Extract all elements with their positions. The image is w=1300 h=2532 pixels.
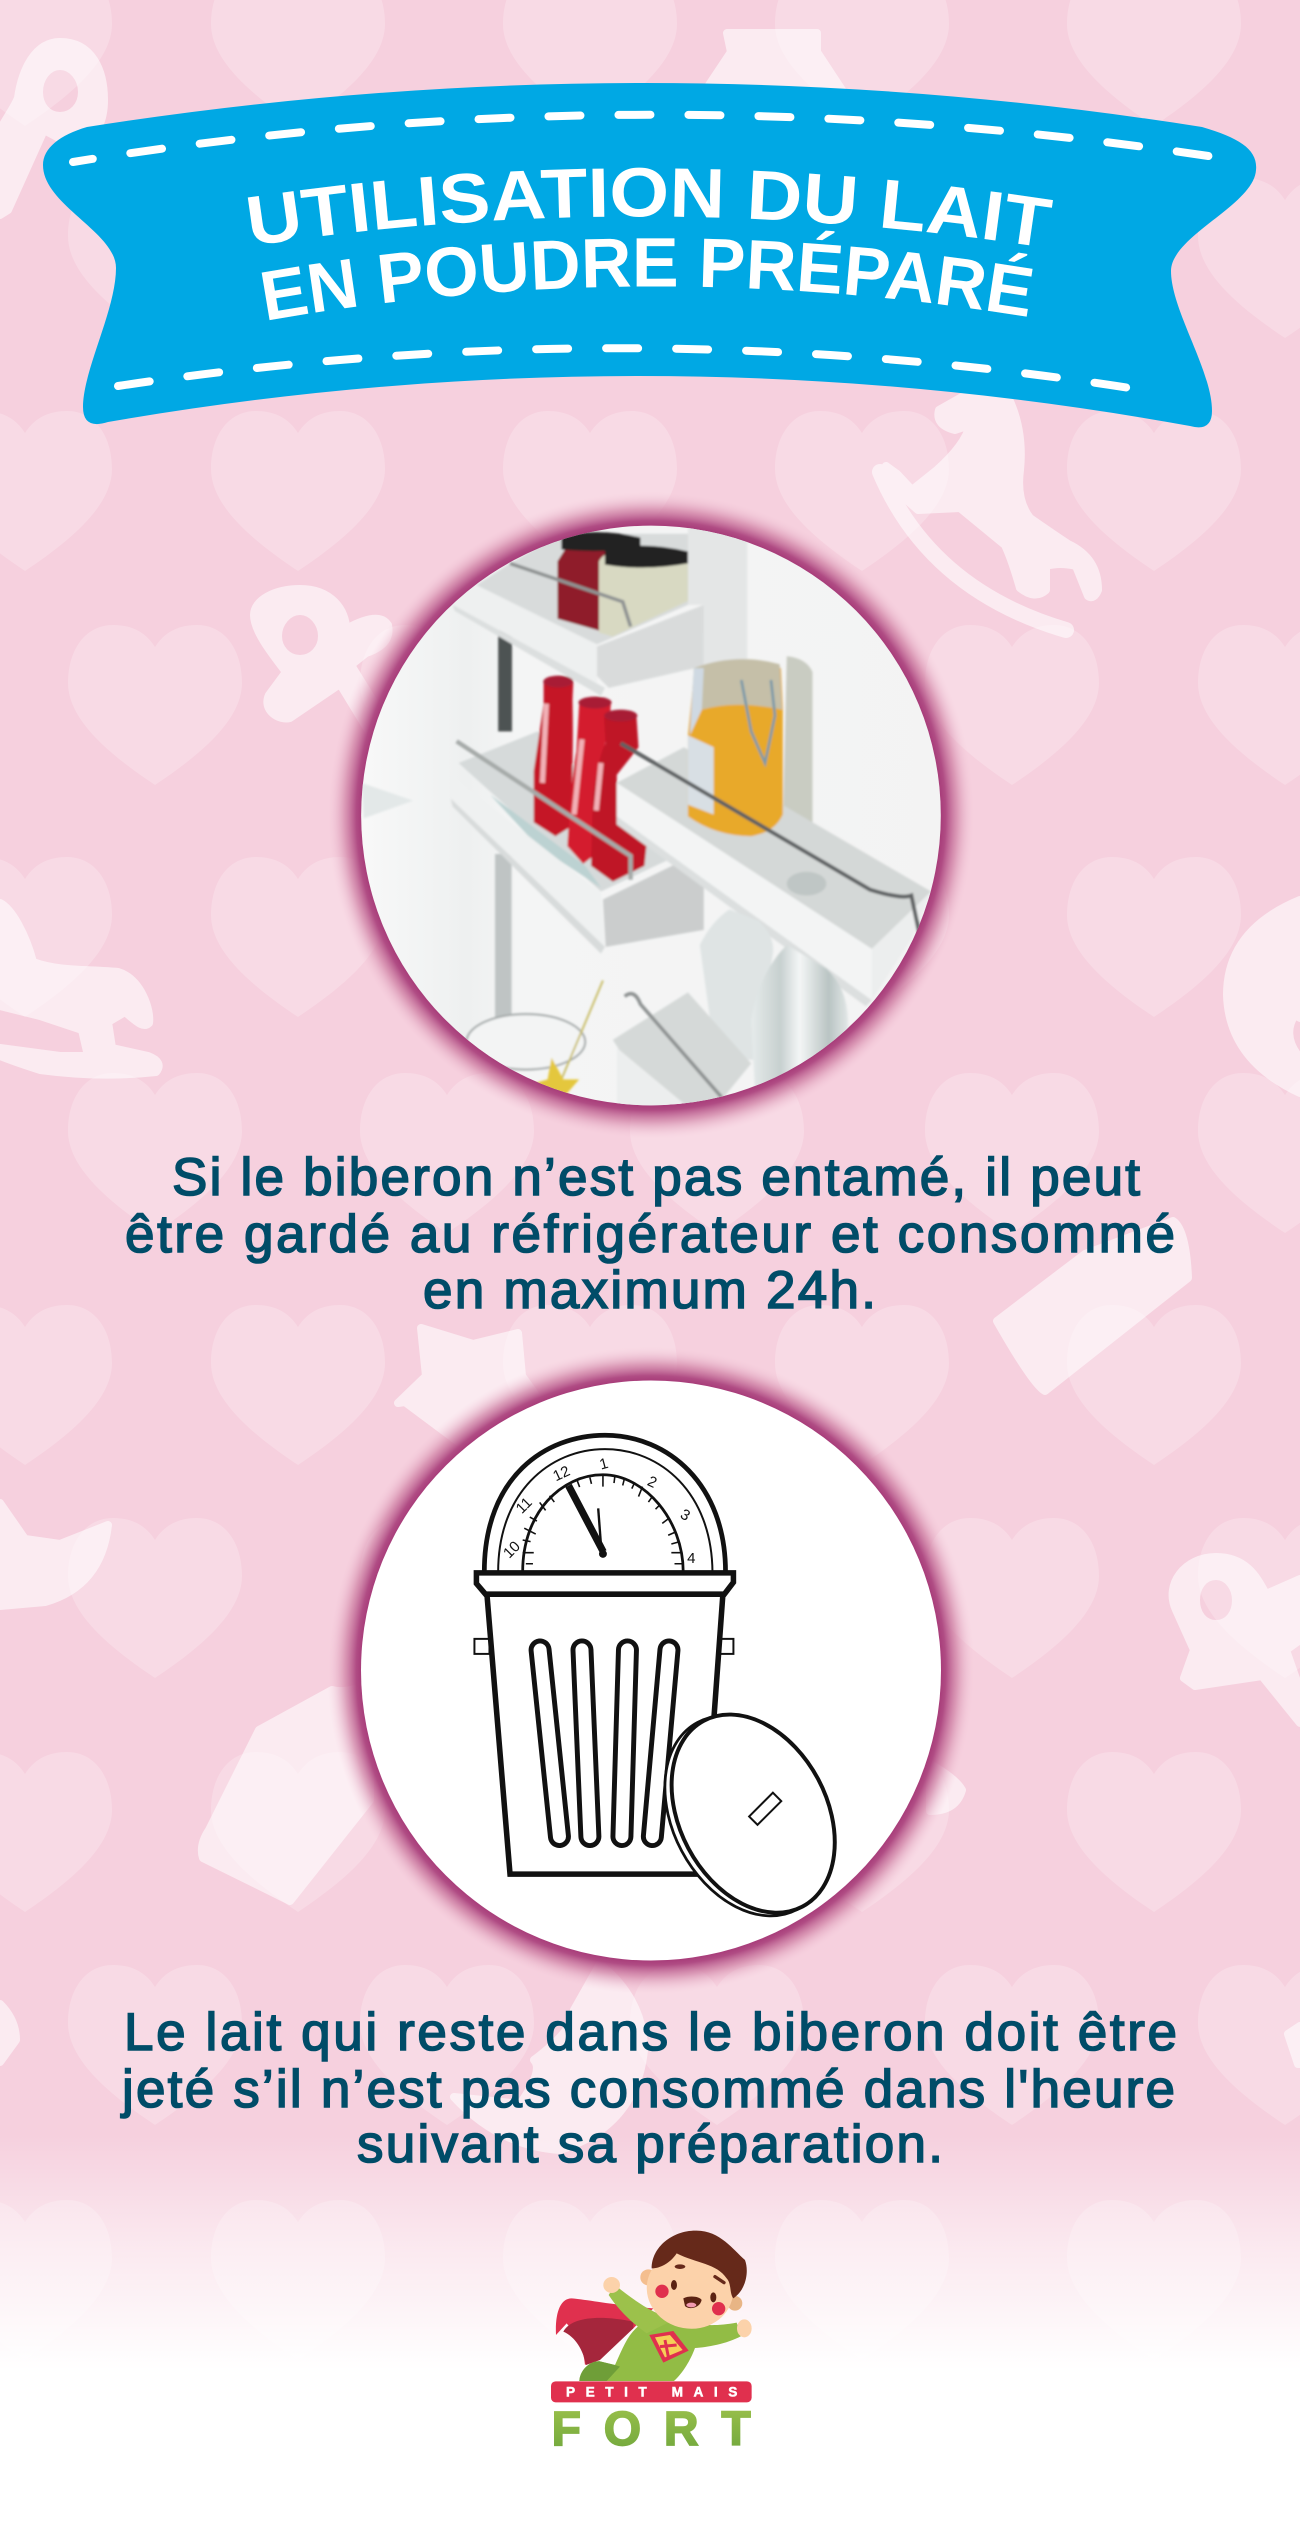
paragraph: discard rule: jeté s’il n’est pas consommé dans l'heure (120, 2060, 1175, 2119)
icon: clock dome: 12 (550, 1463, 573, 1485)
paragraph: refrigerator rule: être gardé au réfrigérateur et consommé (125, 1205, 1175, 1264)
glasses (700, 909, 773, 1060)
bottom white fade (0, 2135, 1300, 2370)
icon: clock dome: 10 (500, 1538, 524, 1562)
icon: superhero baby mascot (556, 2231, 752, 2381)
icon: clock dome: 4 (687, 1550, 696, 1567)
icon: clock dome: 1 (598, 1455, 610, 1474)
logo banner (551, 2381, 752, 2402)
right shelf (617, 747, 931, 949)
top shelf (476, 534, 688, 644)
logo wordmark: FORT (552, 2403, 751, 2456)
icon: clock dome: 11 (513, 1494, 536, 1517)
icon: clock dome: 3 (677, 1506, 693, 1525)
middle shelf (459, 731, 672, 892)
paragraph: refrigerator rule: Si le biberon n’est pas entamé, il peut (172, 1148, 1140, 1207)
paragraph: discard rule: suivant sa préparation. (357, 2115, 943, 2174)
circle photo: refrigerator door shelves (327, 492, 975, 1143)
icon: clock dome: 2 (645, 1473, 660, 1492)
icon: trash can lid (632, 1686, 868, 1944)
paragraph: discard rule (120, 2003, 1177, 2174)
jars top (556, 548, 607, 632)
title ribbon banner: EN POUDRE PRÉPARÉ (262, 230, 1033, 320)
cocktail glass (467, 1014, 585, 1069)
paragraph: discard rule: Le lait qui reste dans le biberon doit être (124, 2003, 1177, 2062)
yellow jar (688, 665, 783, 836)
title text: UTILISATION DU LAIT (248, 168, 1053, 246)
icon: clock dome (484, 1435, 726, 1572)
circle icon: trash can with clock and lid (327, 1346, 975, 1994)
icon: trash can body (474, 1573, 733, 1874)
bottom shelf (613, 992, 751, 1107)
paragraph: refrigerator rule: en maximum 24h. (423, 1261, 876, 1320)
logo banner: PETIT MAIS (566, 2385, 737, 2400)
red bottles (534, 682, 573, 836)
logo: Petit mais Fort (551, 2231, 752, 2456)
paragraph: refrigerator rule (125, 1148, 1175, 1320)
title ribbon banner (43, 83, 1256, 428)
